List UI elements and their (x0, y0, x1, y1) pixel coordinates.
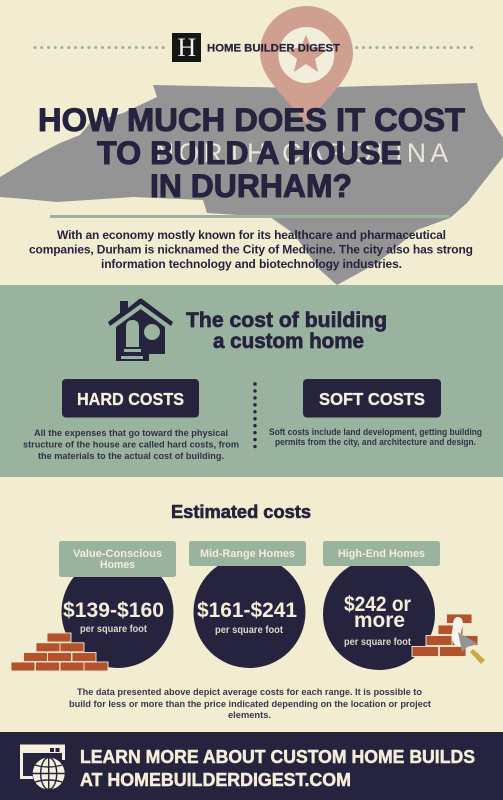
icon: house (108, 298, 173, 361)
intro text: information technology and biotechnology industries. (101, 257, 402, 271)
cost circle: high-end: $242 or (344, 593, 411, 616)
soft costs description: permits from the city, and architecture and design. (275, 437, 476, 447)
title: HOW MUCH DOES IT COST (38, 102, 465, 138)
cost circle: mid-range (194, 556, 306, 668)
header: logo and dotted rules: H (177, 33, 196, 62)
cost circle: value-conscious: per square foot (80, 624, 148, 635)
call to action: LEARN MORE ABOUT CUSTOM HOME BUILDS (80, 746, 475, 767)
header: logo and dotted rules: HOME BUILDER DIGEST (207, 42, 340, 54)
footer banner (0, 732, 503, 800)
footnote: The data presented above depict average costs for each range. It is possible to (77, 687, 422, 697)
intro text: companies, Durham is nicknamed the City of Medicine. The city also has strong (29, 242, 473, 256)
icon: web browser globe (20, 745, 65, 790)
soft costs badge (303, 379, 441, 418)
cost circle: value-conscious: $139-$160 (63, 599, 164, 622)
cost circle: high-end: more (354, 609, 405, 632)
hard costs description: structure of the house are called hard costs, from (23, 440, 239, 450)
tag: value-conscious homes (59, 541, 176, 577)
tag: high-end homes (323, 541, 440, 566)
icon: brick pile (11, 633, 108, 671)
tag: value-conscious homes: Homes (100, 559, 135, 571)
call to action: AT HOMEBUILDERDIGEST.COM (80, 769, 351, 790)
heading: the cost of building a custom home: The cost of building (186, 308, 387, 332)
footnote: elements. (228, 710, 271, 720)
icon: bricks and trowel (412, 614, 485, 664)
icon: location pin (260, 6, 353, 124)
hard costs description: the materials to the actual cost of building. (38, 451, 224, 461)
footnote (69, 687, 431, 720)
cost circle: value-conscious (62, 556, 174, 668)
title: TO BUILD A HOUSE (97, 135, 402, 171)
title (38, 102, 465, 204)
call to action (80, 746, 475, 790)
map of North Carolina: NORTH CAROLINA (155, 138, 448, 168)
intro text (29, 228, 473, 271)
panel: the cost of building (0, 285, 503, 477)
hard costs description: All the expenses that go toward the physical (34, 428, 228, 438)
tag: high-end homes: High-End Homes (338, 548, 425, 560)
heading: the cost of building a custom home (186, 308, 387, 353)
cost circle: mid-range: $161-$241 (197, 599, 297, 622)
tag: value-conscious homes: Value-Conscious (73, 548, 162, 560)
heading: the cost of building a custom home: a custom home (213, 329, 364, 353)
title: IN DURHAM? (150, 168, 352, 204)
footnote: build for less or more than the price indicated depending on the location or project (69, 699, 431, 709)
hard costs badge: HARD COSTS (77, 389, 184, 409)
soft costs description: Soft costs include land development, getting building (269, 427, 482, 437)
hard costs badge (62, 379, 199, 418)
header: logo and dotted rules (35, 33, 478, 62)
soft costs description (269, 427, 482, 447)
heading: estimated costs: Estimated costs (171, 502, 311, 522)
cost circle: mid-range: per square foot (215, 625, 284, 636)
intro text: With an economy mostly known for its healthcare and pharmaceutical (57, 228, 446, 242)
hard costs description (23, 428, 239, 461)
cost circle: high-end: per square foot (344, 637, 412, 648)
cost circle: high-end (323, 558, 435, 670)
soft costs badge: SOFT COSTS (319, 389, 425, 409)
tag: mid-range homes (189, 541, 306, 566)
tag: mid-range homes: Mid-Range Homes (200, 548, 295, 560)
map of North Carolina (0, 83, 503, 285)
